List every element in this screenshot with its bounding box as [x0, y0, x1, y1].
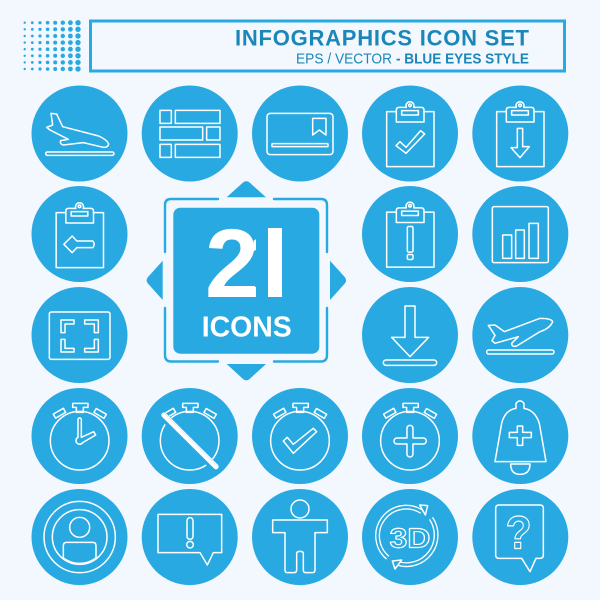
icon: speech bubble alert — [142, 489, 238, 585]
icon: person figure — [252, 489, 348, 585]
ICONS label: ICONS — [202, 312, 292, 344]
subtitle: - BLUE EYES STYLE — [396, 52, 529, 68]
icon: stopwatch clock — [32, 388, 128, 484]
icon: 3D rotate — [362, 489, 458, 585]
center badge: 21 icons — [147, 181, 346, 380]
header banner — [90, 21, 564, 71]
icon: bookmark card — [252, 86, 348, 182]
number 21 — [208, 228, 282, 297]
icon: clipboard alert — [362, 186, 458, 282]
icon: stopwatch plus — [362, 388, 458, 484]
icon: focus frame — [32, 287, 128, 383]
subtitle — [296, 52, 529, 68]
icon: layout grid — [142, 86, 238, 182]
icon: stopwatch check — [252, 388, 348, 484]
icon: bar chart — [472, 186, 568, 282]
icon: plane takeoff — [472, 287, 568, 383]
icon: stopwatch off — [142, 388, 238, 484]
icon: plane landing — [32, 86, 128, 182]
halftone dot decoration — [24, 20, 81, 72]
icon: question bubble: ? — [506, 506, 532, 558]
icon: clipboard download — [472, 86, 568, 182]
icon: question bubble — [472, 489, 568, 585]
icon: 3D rotate: 3D — [390, 523, 430, 554]
title: INFOGRAPHICS ICON SET — [235, 26, 530, 51]
icon: clipboard check — [362, 86, 458, 182]
icon: clipboard back — [32, 186, 128, 282]
subtitle: EPS / VECTOR — [296, 52, 392, 68]
icon: bell plus — [472, 388, 568, 484]
icon: user in circle — [32, 489, 128, 585]
number 21: 21 — [205, 209, 301, 318]
icon: download arrow — [362, 287, 458, 383]
